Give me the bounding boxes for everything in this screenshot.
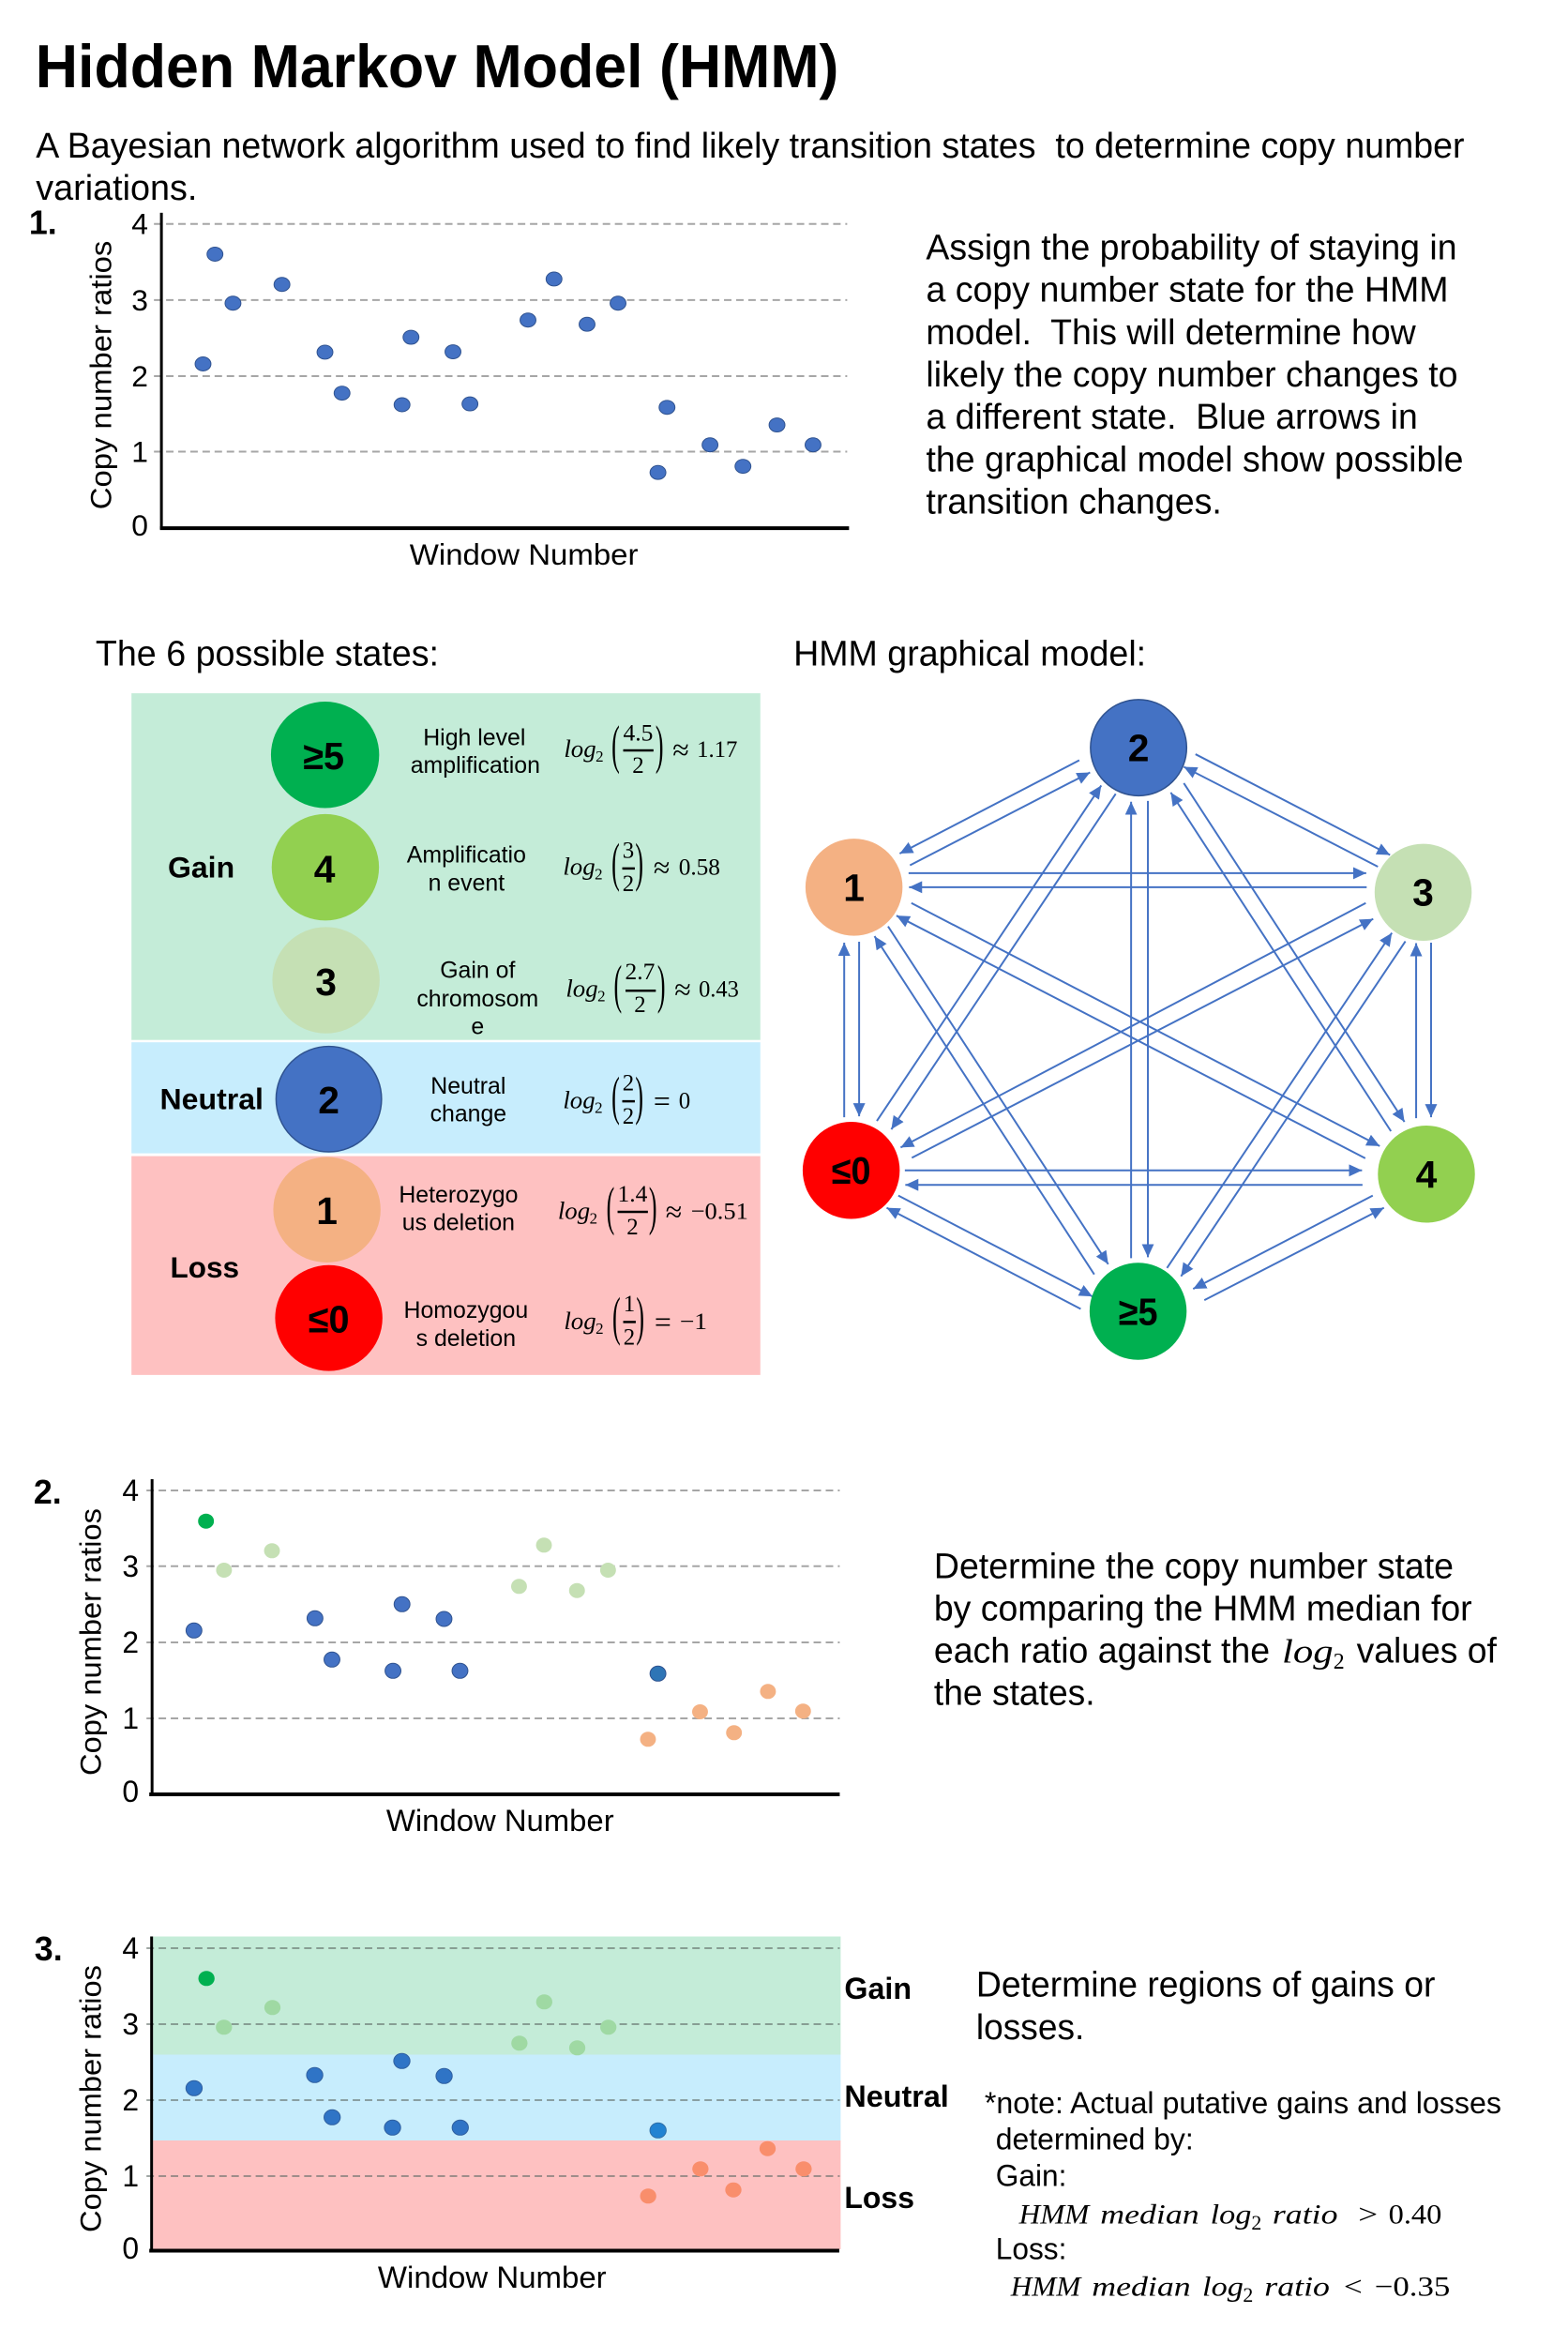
state 1 formula: ( xyxy=(607,1176,614,1236)
state ≤0 formula: log xyxy=(564,1307,596,1335)
step 2 description: by comparing the HMM median for xyxy=(934,1590,1472,1629)
label: loss: Loss xyxy=(170,1250,239,1284)
chart 1: copy number ratios scatter: 1 xyxy=(131,434,148,468)
state 2 formula xyxy=(563,1066,690,1129)
step 1 description xyxy=(926,229,1464,522)
step 2 description: log xyxy=(1282,1633,1334,1671)
state ≥5 formula: 2 xyxy=(632,753,644,779)
note on putative gains and losses: Loss: xyxy=(996,2232,1066,2266)
arrow: 3 to 2 xyxy=(1184,767,1378,867)
state 4 formula: 2 xyxy=(595,866,603,884)
arrow: 4 to ≤0 xyxy=(905,1184,1363,1186)
arrow: ≥5 to ≤0 xyxy=(886,1208,1080,1309)
subtitle xyxy=(36,127,1464,208)
loss formula xyxy=(1010,2272,1450,2306)
label: neutral: Neutral xyxy=(160,1081,264,1115)
state 1 description: us deletion xyxy=(402,1210,515,1236)
state ≤0 formula xyxy=(564,1286,707,1351)
state 3 formula: log xyxy=(565,974,598,1002)
chart 3: gain neutral loss regions: Copy number ratios xyxy=(74,1965,107,2232)
state ≤0 formula: 2 xyxy=(596,1320,604,1338)
arrow: ≥5 to 1 xyxy=(875,936,1094,1275)
node 1: 1 xyxy=(843,866,865,909)
region: neutral xyxy=(153,2054,840,2140)
region label: neutral: Neutral xyxy=(844,2079,949,2113)
arrow: 1 to 2 xyxy=(910,772,1090,865)
state ≥5 formula: ) xyxy=(656,715,663,775)
state 3 formula: ( xyxy=(614,954,622,1014)
chart 1: copy number ratios scatter xyxy=(83,207,849,571)
state ≤0 formula: ( xyxy=(612,1286,621,1346)
title: Hidden Markov Model (HMM) xyxy=(36,32,838,100)
chart 2: copy number states scatter: Window Number xyxy=(386,1804,614,1837)
state ≥5 formula: ≈ xyxy=(672,733,689,766)
panel: gain states xyxy=(131,693,761,1040)
loss formula: log xyxy=(1202,2272,1244,2303)
state ≥5 description xyxy=(411,724,540,779)
state ≤0 circle: ≤0 xyxy=(309,1298,350,1341)
state ≥5 formula: log xyxy=(564,734,596,763)
step 3 number: 3. xyxy=(35,1930,63,1968)
note on putative gains and losses: *note: Actual putative gains and losses xyxy=(985,2086,1501,2120)
step 1 number: 1. xyxy=(29,204,57,242)
state 4 description: Amplificatio xyxy=(407,842,526,869)
state 2 formula: 0 xyxy=(679,1088,690,1113)
state ≤0 description xyxy=(404,1297,528,1352)
state 3 circle xyxy=(272,927,380,1034)
state ≥5 formula: 1.17 xyxy=(697,737,737,763)
state 1 formula: −0.51 xyxy=(691,1200,748,1225)
chart 1: copy number ratios scatter: Copy number ratios xyxy=(83,241,117,509)
node 2: 2 xyxy=(1128,727,1149,770)
node ≥5: ≥5 xyxy=(1119,1290,1157,1333)
node ≤0: ≤0 xyxy=(832,1149,871,1192)
state 4 circle xyxy=(272,814,379,920)
step 2 description: Determine the copy number state xyxy=(934,1548,1454,1587)
arrow: 4 to 1 xyxy=(897,915,1365,1158)
state 2 formula: 2 xyxy=(595,1098,603,1116)
state 2 formula: 2 xyxy=(623,1070,634,1096)
state ≥5 description: amplification xyxy=(411,752,540,779)
subtitle: variations. xyxy=(36,169,197,208)
chart 1: copy number ratios scatter: 2 xyxy=(131,359,148,393)
gain formula: ratio xyxy=(1273,2200,1338,2231)
chart 3: gain neutral loss regions: 4 xyxy=(122,1931,139,1965)
state ≥5 formula: ( xyxy=(611,715,620,775)
chart 2: copy number states scatter: 1 xyxy=(122,1701,139,1735)
state 1 formula: 1.4 xyxy=(618,1182,648,1207)
node 4 xyxy=(1378,1126,1475,1223)
loss formula: 2 xyxy=(1243,2283,1253,2306)
gain formula xyxy=(1018,2200,1441,2234)
state ≥5 formula xyxy=(564,715,737,779)
loss formula: ratio xyxy=(1264,2272,1330,2303)
step 1 description: a different state. Blue arrows in xyxy=(926,398,1418,437)
state 3 formula: ≈ xyxy=(674,973,691,1006)
region: loss xyxy=(153,2140,840,2249)
node 3: 3 xyxy=(1412,871,1434,915)
arrow: 1 to ≥5 xyxy=(888,927,1108,1264)
state 1 formula: log xyxy=(558,1197,590,1225)
arrow: 2 to 3 xyxy=(1196,754,1390,855)
note on putative gains and losses: Gain: xyxy=(996,2159,1066,2193)
state 2 circle: 2 xyxy=(318,1079,339,1122)
state 3 description: chromosom xyxy=(416,986,538,1012)
step 2 number: 2. xyxy=(34,1474,62,1511)
state ≥5 circle xyxy=(271,702,379,808)
arrow: 1 to ≤0 xyxy=(858,942,860,1116)
state 2 formula: log xyxy=(563,1085,596,1113)
step 1 description: likely the copy number changes to xyxy=(926,355,1458,395)
step 2 description: the states. xyxy=(934,1674,1095,1714)
arrow: ≤0 to ≥5 xyxy=(898,1196,1093,1296)
state 2 formula: = xyxy=(654,1084,671,1117)
gain formula: log xyxy=(1211,2200,1251,2231)
state ≤0 description: Homozygou xyxy=(404,1297,528,1323)
chart 3: gain neutral loss regions: 3 xyxy=(122,2007,139,2041)
panel: loss states xyxy=(131,1157,761,1375)
arrow: ≤0 to 1 xyxy=(843,943,845,1117)
arrow: ≥5 to 3 xyxy=(1167,933,1392,1268)
chart 2: copy number states scatter: Copy number ratios xyxy=(74,1508,107,1776)
arrow: 3 to ≥5 xyxy=(1181,942,1406,1277)
state 2 description xyxy=(430,1073,506,1127)
gain formula: HMM xyxy=(1018,2200,1091,2231)
loss formula: < xyxy=(1344,2272,1363,2303)
arrow: 2 to ≤0 xyxy=(891,794,1116,1129)
gain formula: > xyxy=(1358,2200,1378,2231)
chart 2: copy number states scatter: 3 xyxy=(122,1550,139,1583)
state 1 formula: 2 xyxy=(590,1210,597,1228)
state 3 formula: 2 xyxy=(597,987,606,1005)
state ≤0 formula: ) xyxy=(636,1286,644,1346)
state 1 description xyxy=(399,1182,518,1236)
state 2 description: Neutral xyxy=(430,1073,505,1099)
node 1 xyxy=(806,839,902,936)
state 1 description: Heterozygo xyxy=(399,1182,518,1208)
state 1 formula: 2 xyxy=(626,1215,639,1240)
state ≥5 circle: ≥5 xyxy=(303,734,344,778)
state 3 description: Gain of xyxy=(440,958,515,984)
state 1 formula xyxy=(558,1176,748,1240)
gain formula: 0.40 xyxy=(1389,2200,1441,2231)
node ≥5 xyxy=(1090,1263,1186,1360)
state 3 formula xyxy=(565,954,739,1018)
state 4 formula: 0.58 xyxy=(679,855,720,881)
region: gain xyxy=(153,1936,840,2054)
step 2 description: values of xyxy=(1357,1632,1497,1671)
chart 2: copy number states scatter: 2 xyxy=(122,1626,139,1659)
chart 2: copy number states scatter: 4 xyxy=(122,1474,139,1507)
state 2 formula: ) xyxy=(635,1066,643,1126)
state 2 formula: 2 xyxy=(623,1104,634,1129)
chart 3: gain neutral loss regions: Window Number xyxy=(378,2261,607,2294)
state 3 description xyxy=(416,958,538,1040)
gain formula: 2 xyxy=(1251,2211,1261,2234)
state ≤0 formula: 1 xyxy=(624,1292,635,1317)
state ≤0 formula: −1 xyxy=(680,1309,707,1335)
chart 1: copy number ratios scatter: 3 xyxy=(131,283,148,317)
state 4 formula: ( xyxy=(611,832,620,892)
arrow: 1 to 4 xyxy=(912,903,1380,1146)
state 4 description: n event xyxy=(429,870,505,897)
chart 1: copy number ratios scatter: 0 xyxy=(131,508,148,542)
arrow: 3 to 1 xyxy=(909,886,1366,888)
arrow: ≥5 to 2 xyxy=(1130,802,1132,1258)
step 2 description: each ratio against the xyxy=(934,1632,1270,1671)
chart 2: copy number states scatter: 0 xyxy=(122,1775,139,1808)
state 2 circle xyxy=(276,1047,382,1152)
state 3 description: e xyxy=(471,1014,484,1040)
state 4 description xyxy=(407,842,526,897)
region label: loss: Loss xyxy=(844,2181,914,2215)
state 3 formula: 2 xyxy=(634,992,646,1018)
state 1 formula: ) xyxy=(649,1176,657,1236)
chart 3: gain neutral loss regions: 0 xyxy=(122,2231,139,2265)
arrow: 4 to 3 xyxy=(1415,944,1417,1118)
state 3 formula: 0.43 xyxy=(699,976,739,1002)
state 2 formula: ( xyxy=(611,1066,620,1126)
note on putative gains and losses: determined by: xyxy=(996,2123,1194,2156)
state ≥5 description: High level xyxy=(423,724,525,750)
step 3 description xyxy=(976,1965,1435,2048)
state 1 circle xyxy=(273,1157,381,1263)
state 4 formula: log xyxy=(563,853,596,881)
loss formula: HMM xyxy=(1010,2272,1083,2303)
arrow: 3 to 4 xyxy=(1430,943,1432,1117)
node ≤0 xyxy=(803,1122,899,1219)
state ≥5 formula: 4.5 xyxy=(624,720,653,746)
step 3 description: Determine regions of gains or xyxy=(976,1965,1435,2005)
arrow: 4 to ≥5 xyxy=(1193,1196,1373,1289)
arrow: ≤0 to 2 xyxy=(877,785,1101,1121)
state ≤0 circle xyxy=(275,1265,383,1371)
step 1 description: transition changes. xyxy=(926,483,1222,522)
HMM graphical model xyxy=(803,700,1475,1360)
state 1 formula: ≈ xyxy=(666,1196,682,1229)
arrow: 2 to 1 xyxy=(899,761,1079,854)
chart 3: gain neutral loss regions xyxy=(74,1931,840,2294)
state ≤0 formula: = xyxy=(655,1306,671,1338)
node 3 xyxy=(1375,844,1471,941)
arrow: 3 to ≤0 xyxy=(900,903,1365,1147)
arrow: 4 to 2 xyxy=(1170,793,1391,1131)
chart 2: copy number states scatter xyxy=(74,1474,839,1837)
step 1 description: model. This will determine how xyxy=(926,313,1416,353)
node 4: 4 xyxy=(1416,1153,1438,1196)
arrow: ≤0 to 3 xyxy=(912,919,1373,1157)
step 3 description: losses. xyxy=(976,2008,1084,2048)
note on putative gains and losses xyxy=(985,2086,1501,2306)
node 2 xyxy=(1091,700,1186,795)
state 3 formula: 2.7 xyxy=(625,960,655,985)
state 3 formula: ) xyxy=(657,954,665,1014)
region label: gain: Gain xyxy=(844,1972,912,2005)
chart 1: copy number ratios scatter: 4 xyxy=(131,207,148,241)
arrow: 2 to 4 xyxy=(1184,783,1405,1122)
step 2 description xyxy=(934,1548,1497,1714)
gain formula: median xyxy=(1100,2200,1199,2231)
subtitle: A Bayesian network algorithm used to find likely transition states to determine copy number xyxy=(36,127,1464,166)
panel: neutral state xyxy=(131,1042,761,1154)
state 2 description: change xyxy=(430,1101,506,1127)
state 4 circle: 4 xyxy=(314,847,336,890)
chart 3: gain neutral loss regions: 2 xyxy=(122,2083,139,2117)
chart 3: gain neutral loss regions: 1 xyxy=(122,2159,139,2193)
state 4 formula: ) xyxy=(635,832,643,892)
loss formula: −0.35 xyxy=(1375,2272,1450,2303)
arrow: 1 to 3 xyxy=(909,872,1366,874)
state ≥5 formula: 2 xyxy=(596,748,604,765)
state 4 formula: 3 xyxy=(623,839,634,864)
state 4 formula: 2 xyxy=(623,871,634,897)
step 1 description: Assign the probability of staying in xyxy=(926,229,1457,268)
heading: HMM graphical model: HMM graphical model: xyxy=(793,635,1146,674)
label: gain: Gain xyxy=(168,851,234,885)
step 1 description: the graphical model show possible xyxy=(926,440,1464,479)
state 1 circle: 1 xyxy=(316,1189,338,1233)
state 4 formula xyxy=(563,832,720,897)
arrow: ≤0 to 4 xyxy=(905,1170,1362,1172)
heading: the 6 possible states: The 6 possible states: xyxy=(96,635,439,674)
arrow: 2 to ≥5 xyxy=(1147,801,1149,1257)
arrow: ≥5 to 4 xyxy=(1204,1208,1384,1300)
step 1 description: a copy number state for the HMM xyxy=(926,271,1449,310)
state 4 formula: ≈ xyxy=(654,852,670,885)
state ≤0 description: s deletion xyxy=(416,1325,516,1352)
loss formula: median xyxy=(1092,2272,1191,2303)
state 3 circle: 3 xyxy=(315,960,337,1004)
chart 1: copy number ratios scatter: Window Number xyxy=(410,537,639,571)
state ≤0 formula: 2 xyxy=(624,1325,635,1351)
step 2 description: 2 xyxy=(1334,1650,1345,1674)
